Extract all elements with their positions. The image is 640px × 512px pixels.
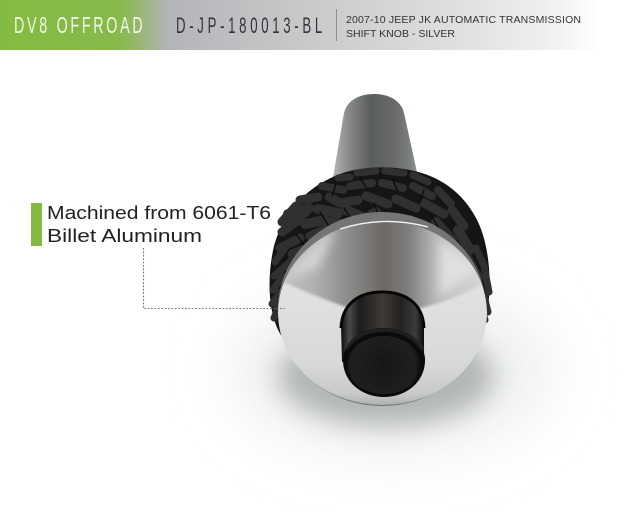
product: shift knob (227, 94, 557, 460)
product description: 2007-10 JEEP JK AUTOMATIC TRANSMISSION (346, 14, 581, 26)
callout: material (31, 202, 271, 246)
black push button (341, 292, 425, 397)
bright edge, upper left (290, 231, 337, 277)
brushed cone shading (284, 221, 482, 310)
button neck (341, 293, 424, 362)
callout text: Machined from 6061-T6 (47, 202, 271, 223)
soft shadow (227, 280, 557, 460)
part number: D-JP-180013-BL (176, 14, 326, 38)
callout: material: Billet Aluminum (47, 225, 202, 246)
aluminum rim (278, 212, 486, 406)
brand name: DV8 OFFROAD (14, 14, 145, 39)
green accent bar (31, 203, 42, 246)
highlight on rim (340, 221, 428, 229)
rubber grip (270, 167, 490, 342)
dotted leader line (144, 248, 285, 308)
header banner (0, 0, 640, 50)
bright edge, upper right (440, 240, 480, 296)
product description: SHIFT KNOB - SILVER (346, 28, 455, 40)
aluminum face (278, 222, 487, 405)
shaft (330, 94, 422, 195)
button cap (343, 328, 425, 397)
